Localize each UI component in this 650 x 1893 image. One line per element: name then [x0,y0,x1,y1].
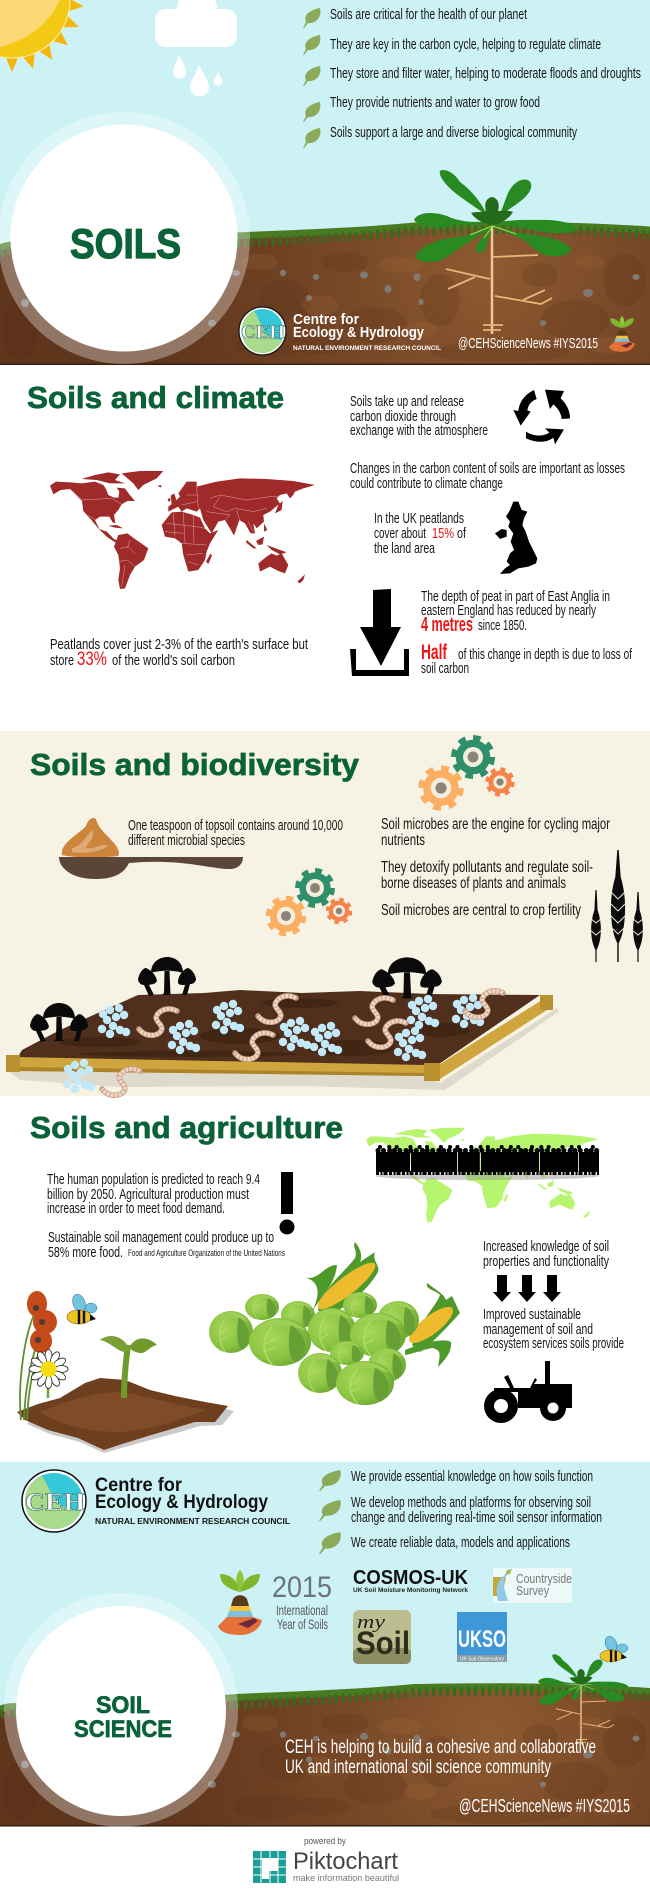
bullet list: what CEH does [319,1469,602,1554]
panel: soil science [0,1462,650,1827]
logo: mySoil [353,1610,411,1664]
ground: soil cross-section [0,1684,650,1826]
text: carbon exchange: carbon dioxide through [350,409,456,425]
footer: powered by Piktochart: make information beautiful [293,1873,399,1884]
footer: powered by Piktochart [253,1836,399,1884]
text: improved management: Improved sustainable [483,1307,581,1323]
logo: mySoil: Soil [356,1625,410,1661]
soil bed [6,990,558,1090]
panel: soils hero [0,0,650,365]
text: increased knowledge [483,1239,610,1270]
text: carbon exchange: Soils take up and release [350,394,464,410]
text: East Anglia peat depth: soil carbon [421,661,469,677]
bullet list: why soils matter: They provide nutrients and water to grow food [330,95,540,111]
icon: gears upper [421,738,513,808]
text: UK peatlands: In the UK peatlands [374,511,464,527]
panel: soils and biodiversity [0,731,650,1096]
text: UK peatlands [374,511,467,557]
text: population: billion by 2050. Agricultural production must [47,1187,249,1203]
icons: mushrooms [30,957,442,1042]
logo: international year of soils: 2015 [272,1571,332,1604]
text: peatland share of carbon: store [50,653,74,669]
icon: recycling arrows [513,390,570,444]
text: sustainable management: Food and Agriculture Organization of the United Nations [128,1248,285,1259]
logo: Countryside Survey: Countryside [516,1571,572,1586]
circle ring [0,112,250,364]
heading: Soils and biodiversity [30,747,360,782]
text: carbon exchange [350,394,488,439]
logo: international year of soils [218,1570,332,1635]
text: microbe roles: Soil microbes are central to crop fertility [381,902,581,919]
logo: CEH large [22,1470,86,1532]
text: UK peatlands: of [457,526,467,542]
bullet list: why soils matter [303,7,641,148]
panel: soils and climate [27,380,633,677]
text: population [47,1172,260,1217]
text: CEH name: NATURAL ENVIRONMENT RESEARCH COUNCIL [95,1517,290,1526]
logo: CEH: NATURAL ENVIRONMENT RESEARCH COUNCIL [293,346,441,352]
text: CEH name: Ecology & Hydrology [95,1492,268,1513]
world map: peatlands [50,471,315,589]
text: microbe roles [381,816,610,919]
text: East Anglia peat depth [421,589,633,677]
text: UK peatlands: cover about [374,526,426,542]
text: CEH name [95,1475,290,1526]
logo: CEH: Centre for [293,312,359,328]
text: peatland share of carbon: 33% [77,649,107,670]
text: East Anglia peat depth: 4 metres [421,614,473,636]
icon: sun [0,0,84,72]
heading: Soils and climate [27,380,284,415]
text: East Anglia peat depth: Half [421,641,448,664]
icon: cloud with rain [155,0,237,96]
text: teaspoon fact: One teaspoon of topsoil contains around 10,000 [128,818,343,834]
icon: UK map [495,502,537,574]
world map: green [366,1128,599,1222]
text: CEH name: Centre for [95,1475,183,1496]
text: sustainable management: Sustainable soil management could produce up to [48,1230,274,1246]
logo: Countryside Survey: Survey [516,1583,549,1598]
text: UK peatlands: 15% [432,526,454,542]
text: CEH community statement [285,1737,596,1778]
logo: CEH large: CEH [25,1489,86,1516]
title: SOILS [70,220,181,267]
logo: international year of soils: International [276,1602,328,1618]
text: carbon content [350,461,625,492]
ground: soil cross-section [0,222,650,365]
icon: depth arrow into tray [350,589,409,676]
text: peatland share of carbon: Peatlands cover just 2-3% of the earth's surface but [50,637,308,653]
text: CEH community statement: UK and international soil science community [285,1757,551,1778]
footer: powered by Piktochart: powered by [304,1836,346,1846]
text: teaspoon fact [128,818,343,849]
logo: international year of soils small [609,316,635,352]
bullet list: why soils matter: Soils are critical for the health of our planet [330,7,527,23]
logo: Piktochart mark [253,1851,286,1883]
icon: crowd of people [375,1147,599,1180]
title [74,1692,172,1743]
text: microbe roles: nutrients [381,832,425,849]
logo: international year of soils: Year of Soils [277,1616,328,1632]
panel: soils and agriculture [17,1110,624,1453]
text: peatland share of carbon [50,637,308,670]
text: population: The human population is predicted to reach 9.4 [47,1172,260,1188]
text: microbe roles: borne diseases of plants and animals [381,875,566,892]
text: peatland share of carbon: of the world's soil carbon [112,653,235,669]
icons: worms [102,991,503,1095]
text: sustainable management: 58% more food. [48,1245,123,1261]
footer: powered by Piktochart: Piktochart [293,1848,398,1875]
logo: UKSO [457,1612,507,1662]
logo: mySoil: my [357,1612,386,1633]
circle badge [10,124,238,352]
icon: bee [67,1292,97,1324]
icon: gears lower [268,870,351,934]
illustration: flowers and sprout [17,1291,234,1453]
logo: UKSO: UKSO [458,1626,506,1653]
icon: small plant [538,1654,628,1744]
logo: UKSO: UK Soil Observatory [460,1656,504,1662]
icon: wheat [590,850,644,962]
logo: CEH: CEH [241,322,285,343]
icon: tractor [484,1361,572,1423]
icon: bee [600,1635,628,1662]
icon: plant with roots [414,170,578,334]
text: carbon exchange: exchange with the atmosphere [350,423,488,439]
logo: COSMOS-UK: UK Soil Moisture Monitoring Network [353,1588,469,1594]
logo: CEH [239,307,441,355]
circle ring [4,1593,238,1827]
icon: teaspoon of soil [59,818,243,879]
text: UK peatlands: the land area [374,541,436,557]
icons: microbes [63,994,484,1093]
text: teaspoon fact: different microbial species [128,833,245,849]
text: population: increase in order to meet food demand. [47,1201,225,1217]
text: improved management: management of soil and [483,1322,593,1338]
text: improved management [483,1307,624,1352]
text: carbon content: could contribute to climate change [350,476,503,492]
icon: exclamation mark [280,1172,294,1234]
text: sustainable management [48,1230,285,1261]
heading: Soils and agriculture [30,1110,343,1145]
logo: CEH: Ecology & Hydrology [293,325,424,341]
icon: three down arrows [493,1275,561,1302]
text: East Anglia peat depth: since 1850. [478,618,527,634]
title: SCIENCE [74,1716,172,1743]
logo: Countryside Survey [493,1568,572,1603]
logo: COSMOS-UK: COSMOS-UK [353,1567,469,1589]
illustration: cabbages and corn [209,1242,460,1405]
title: SOIL [96,1692,150,1719]
circle badge [16,1606,226,1816]
